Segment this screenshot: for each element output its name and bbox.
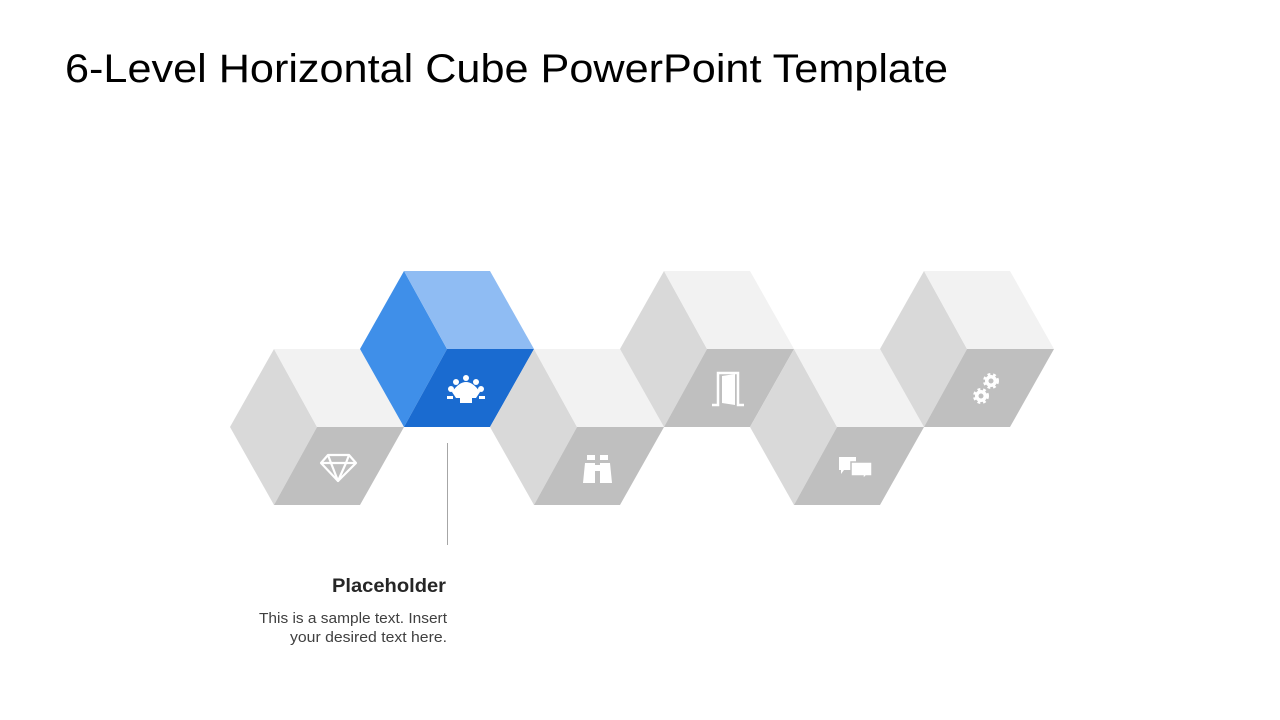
icon: chat bubbles [839, 457, 872, 479]
cube 6: gears [880, 271, 1054, 427]
text block: placeholder: Placeholder [332, 576, 447, 597]
cube 2: blue highlighted [360, 271, 534, 427]
text block: placeholder: This is a sample text. Insert [259, 610, 448, 627]
text block: placeholder [259, 576, 448, 646]
cube 5: chat bubbles [750, 349, 924, 505]
icon: meeting table [447, 375, 485, 403]
cube 1: diamond [230, 349, 404, 505]
icon: door [712, 373, 744, 405]
title: 6-Level Horizontal Cube PowerPoint Template [65, 47, 948, 91]
cube 3: binoculars [490, 349, 664, 505]
cube 4: door [620, 271, 794, 427]
icon: gears [975, 375, 997, 402]
connector line [446, 443, 448, 545]
icon: binoculars [583, 455, 612, 483]
icon: diamond [321, 455, 356, 481]
text block: placeholder: your desired text here. [290, 629, 447, 646]
